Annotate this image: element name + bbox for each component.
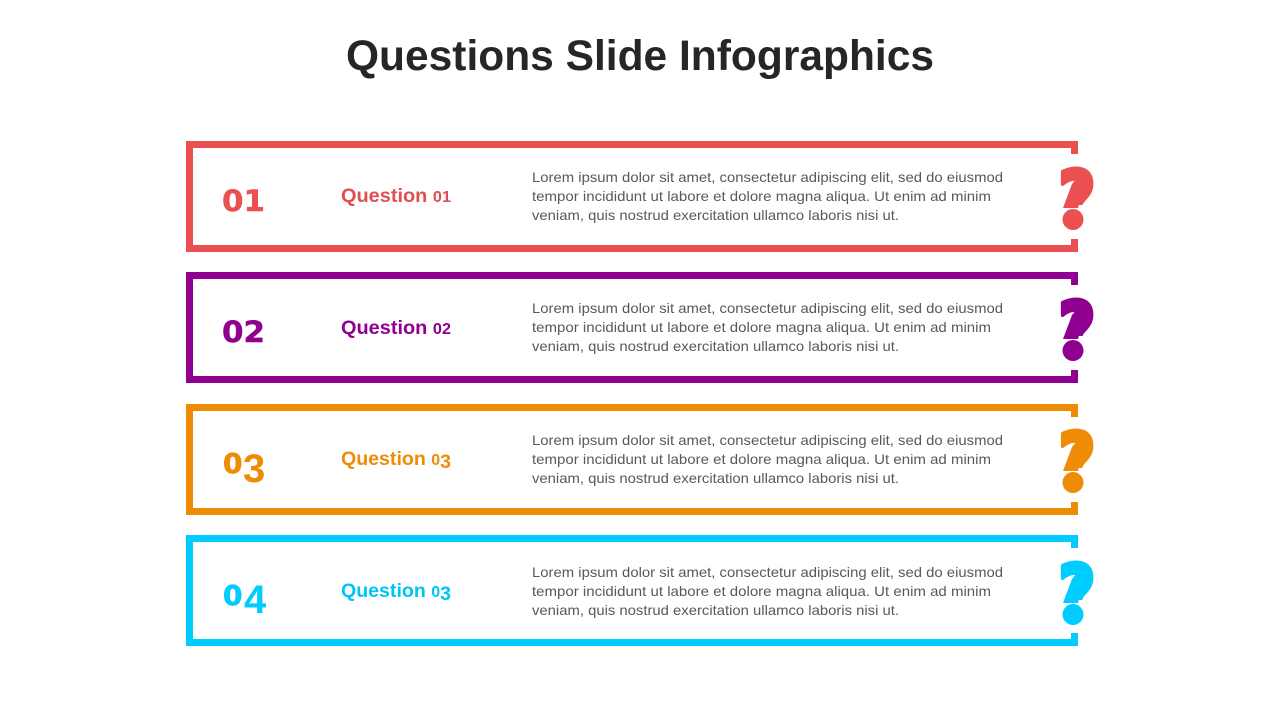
icon: question mark [1060, 298, 1094, 361]
question label: Question 02 [341, 318, 451, 339]
body text: tempor incididunt ut labore et dolore magna aliqua. Ut enim ad minim [532, 319, 991, 335]
icon: question mark: ? [1058, 417, 1096, 510]
body text [532, 564, 1003, 618]
body text [532, 300, 1003, 354]
body text: veniam, quis nostrud exercitation ullamco laboris nisi ut. [532, 470, 899, 486]
body text: veniam, quis nostrud exercitation ullamco laboris nisi ut. [532, 602, 899, 618]
body text [532, 432, 1003, 486]
icon: question mark: ? [1058, 549, 1096, 642]
question label: Question 0 [341, 449, 440, 470]
body text: Lorem ipsum dolor sit amet, consectetur adipiscing elit, sed do eiusmod [532, 432, 1003, 448]
panel: question 02 [190, 276, 1096, 380]
frame [190, 538, 1074, 642]
icon: question mark [1060, 428, 1094, 493]
question label: 3 [440, 584, 451, 605]
frame [190, 408, 1074, 512]
frame [190, 144, 1074, 248]
body text: tempor incididunt ut labore et dolore magna aliqua. Ut enim ad minim [532, 188, 991, 204]
panel: question 03 [190, 408, 1096, 512]
icon: question mark [1060, 560, 1094, 625]
panel: question 04 [190, 538, 1096, 642]
body text: Lorem ipsum dolor sit amet, consectetur adipiscing elit, sed do eiusmod [532, 564, 1003, 580]
question label: 3 [440, 452, 451, 473]
body text: tempor incididunt ut labore et dolore magna aliqua. Ut enim ad minim [532, 583, 991, 599]
number: 02 [222, 315, 265, 349]
title: Questions Slide Infographics [346, 32, 934, 80]
body text: Lorem ipsum dolor sit amet, consectetur adipiscing elit, sed do eiusmod [532, 300, 1003, 316]
question label: Question 01 [341, 186, 451, 207]
number: 4 [244, 578, 267, 622]
icon: question mark: ? [1058, 155, 1096, 248]
body text: tempor incididunt ut labore et dolore magna aliqua. Ut enim ad minim [532, 451, 991, 467]
body text: veniam, quis nostrud exercitation ullamco laboris nisi ut. [532, 207, 899, 223]
frame [190, 276, 1074, 380]
number: 0 [223, 579, 242, 612]
number: 3 [243, 447, 265, 491]
question label: Question 0 [341, 581, 440, 602]
body text [532, 169, 1003, 223]
body text: veniam, quis nostrud exercitation ullamco laboris nisi ut. [532, 338, 899, 354]
body text: Lorem ipsum dolor sit amet, consectetur adipiscing elit, sed do eiusmod [532, 169, 1003, 185]
number: 0 [223, 447, 242, 480]
panel: question 01 [190, 144, 1096, 248]
icon: question mark [1060, 166, 1094, 230]
icon: question mark: ? [1058, 286, 1096, 379]
number: 01 [222, 184, 265, 218]
